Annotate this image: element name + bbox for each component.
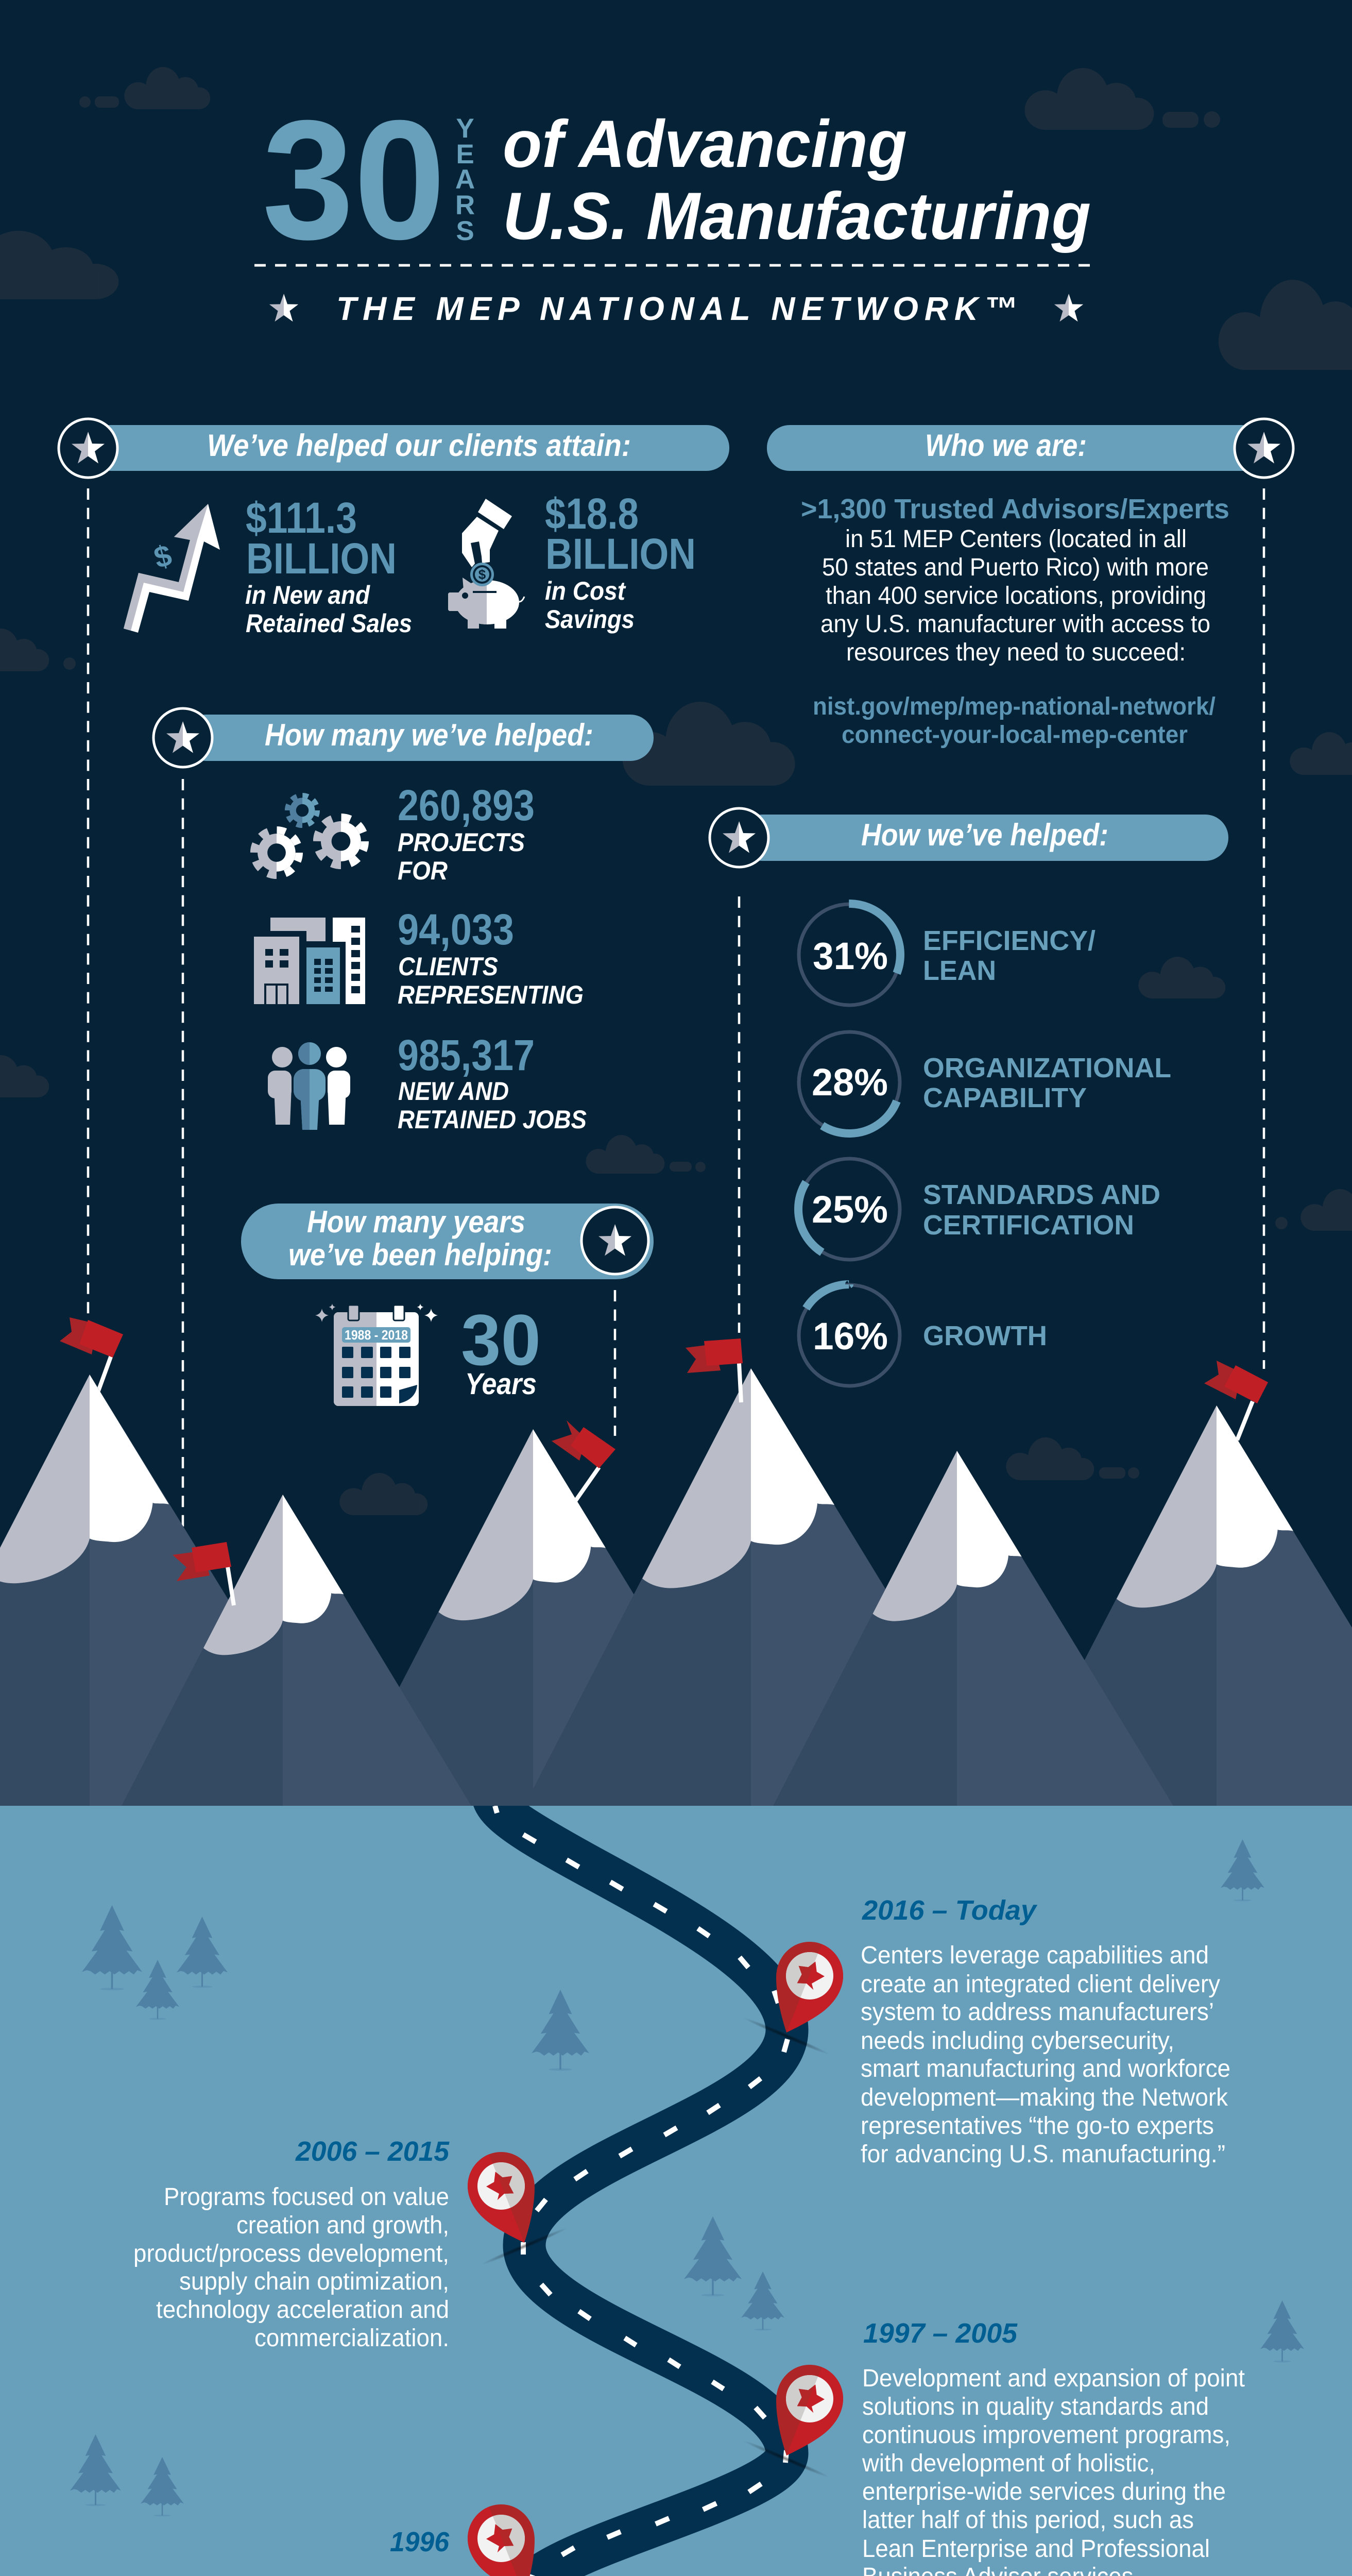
milestone: 2006 – 2015: technology acceleration and <box>156 2296 449 2324</box>
who we are text: >1,300 Trusted Advisors/Experts <box>801 494 1229 524</box>
vertical word YEARS: Y <box>456 113 474 144</box>
milestone: 2016 – Today: Centers leverage capabilities and <box>861 1942 1209 1969</box>
donut: 31% efficiency <box>798 904 1096 1006</box>
timeline road <box>493 1798 788 2576</box>
icon: gears <box>254 795 365 875</box>
milestone: 1997 – 2005: 1997 – 2005 <box>863 2318 1018 2349</box>
stat: jobs: NEW AND <box>398 1077 509 1106</box>
header: who we are: Who we are: <box>925 428 1087 463</box>
who we are text: in 51 MEP Centers (located in all <box>845 526 1187 553</box>
figure: $111.3 <box>246 494 357 542</box>
caption: in Cost <box>545 577 626 605</box>
donut: 31% efficiency: EFFICIENCY/ <box>923 925 1096 956</box>
icon: rising arrow <box>124 504 220 633</box>
header: we've helped our clients attain: We’ve helped our clients attain: <box>207 428 631 463</box>
link: nist.gov/mep/mep-national-network/ <box>813 693 1216 720</box>
stat: clients: REPRESENTING <box>398 980 584 1009</box>
milestone: 2006 – 2015: creation and growth, <box>236 2212 449 2239</box>
stat: savings: BILLION <box>545 530 696 578</box>
who we are text: 50 states and Puerto Rico) with more <box>822 554 1209 581</box>
stat: savings <box>448 489 696 634</box>
who we are text: any U.S. manufacturer with access to <box>820 611 1210 638</box>
icon: people <box>268 1042 350 1130</box>
mountain 6 <box>1009 1405 1352 1806</box>
icon: star right <box>1054 294 1083 321</box>
vertical word YEARS: S <box>456 216 474 246</box>
milestone: 2006 – 2015: commercialization. <box>254 2325 449 2352</box>
stat: projects: FOR <box>398 856 448 885</box>
flag 6 <box>1204 1361 1268 1403</box>
header: how many we've helped <box>153 708 654 767</box>
stat: 30 years: 30 <box>461 1299 541 1380</box>
caption: in New and <box>245 581 370 609</box>
background: night sky <box>0 0 1352 1806</box>
figure: $18.8 <box>545 489 639 538</box>
title number 30: 30 <box>262 84 446 275</box>
milestone: 2006 – 2015: 2006 – 2015 <box>295 2136 450 2167</box>
stat: sales: Retained Sales <box>246 609 412 638</box>
milestone: 1997 – 2005: solutions in quality standards and <box>862 2393 1209 2420</box>
vertical word YEARS: E <box>456 139 474 170</box>
flag 4 <box>686 1338 743 1373</box>
milestone: 2016 – Today: representatives “the go-to experts <box>861 2112 1214 2140</box>
milestone: 2016 – Today: development—making the Network <box>861 2084 1228 2111</box>
timeline pins <box>468 1942 843 2576</box>
vertical word YEARS: A <box>455 164 475 195</box>
flag 1 <box>60 1317 123 1358</box>
subtitle text: THE MEP NATIONAL NETWORK™ <box>336 290 1017 327</box>
milestone: 2016 – Today: system to address manufacturers’ <box>861 1998 1214 2026</box>
milestone: 2016 – Today <box>861 1895 1230 2168</box>
header: we've helped our clients attain <box>59 419 729 478</box>
icon: hand and piggy bank: $ <box>478 567 486 582</box>
dashed guide lines <box>88 488 1264 1543</box>
mountain 5 <box>773 1451 1173 1806</box>
donut: 25% standards and certification <box>798 1158 1160 1260</box>
icon: hand and piggy bank <box>448 499 524 629</box>
donut: 16% growth: GROWTH <box>923 1320 1047 1351</box>
header: how we've helped: How we’ve helped: <box>861 818 1108 852</box>
stat: clients <box>254 905 584 1009</box>
donut: 16% growth: 16% <box>813 1315 888 1358</box>
title block <box>262 84 1091 275</box>
milestone: 1997 – 2005: Lean Enterprise and Professional <box>862 2535 1210 2563</box>
donut: 31% efficiency: LEAN <box>923 955 996 986</box>
icon: calendar <box>315 1303 438 1406</box>
flag 3 <box>552 1420 615 1468</box>
milestone: 1997 – 2005: with development of holistic, <box>862 2450 1155 2477</box>
milestone: 2006 – 2015: Programs focused on value <box>164 2183 449 2211</box>
trees <box>70 1839 1304 2576</box>
donut: 25% standards and certification: CERTIFICATION <box>923 1210 1134 1241</box>
who we are text <box>801 494 1229 749</box>
stat: clients: 94,033 <box>398 905 514 954</box>
icon: calendar: 1988 - 2018 <box>345 1327 408 1343</box>
title line 1: of Advancing <box>503 106 907 181</box>
background clouds <box>0 67 1352 1515</box>
donut: 25% standards and certification: STANDARDS AND <box>923 1179 1160 1210</box>
who we are text: resources they need to succeed: <box>846 639 1186 666</box>
vertical word YEARS: R <box>455 190 475 221</box>
stat: jobs: RETAINED JOBS <box>398 1105 587 1134</box>
milestone: 1996: 1996 <box>390 2527 450 2557</box>
header: who we are <box>767 419 1293 478</box>
header: how we've helped <box>710 808 1228 867</box>
flag poles in front of peaks <box>228 1363 741 1605</box>
mountain 4 <box>524 1368 1018 1806</box>
milestone: 2016 – Today: create an integrated client delivery <box>861 1971 1220 1998</box>
icon: star left <box>269 294 298 321</box>
header: how many years: How many years <box>307 1205 525 1239</box>
road centre dashes <box>495 1806 788 2576</box>
milestone: 2006 – 2015 <box>133 2136 450 2352</box>
milestone: 1997 – 2005: continuous improvement programs, <box>862 2421 1230 2449</box>
stat: 30 years <box>315 1299 541 1406</box>
who we are text: than 400 service locations, providing <box>826 582 1206 609</box>
who we are text: connect-your-local-mep-center <box>842 721 1188 749</box>
milestone: 2016 – Today: for advancing U.S. manufacturing.” <box>861 2141 1225 2168</box>
stat: projects: PROJECTS <box>398 828 525 857</box>
stat: projects <box>250 790 534 880</box>
header: how many years <box>241 1204 654 1279</box>
milestone: 1997 – 2005: latter half of this period, such as <box>862 2506 1194 2534</box>
milestone: 2016 – Today: 2016 – Today <box>862 1895 1038 1926</box>
milestone: 2006 – 2015: product/process development, <box>133 2240 449 2267</box>
stat: clients: CLIENTS <box>398 952 498 981</box>
donut: 28% organizational capability: ORGANIZATIONAL <box>923 1053 1171 1083</box>
mountain 2 <box>122 1495 471 1806</box>
subtitle with stars <box>269 290 1083 327</box>
milestone: 1996 <box>106 2527 450 2576</box>
donut: 28% organizational capability <box>798 1031 1171 1133</box>
donut: 31% efficiency: 31% <box>813 935 888 977</box>
milestone: 1997 – 2005: enterprise-wide services during the <box>862 2478 1226 2505</box>
vertical word YEARS <box>455 113 475 246</box>
donut: 16% growth <box>798 1284 1047 1386</box>
stat: savings: Savings <box>545 605 635 634</box>
lower panel background <box>0 1806 1352 2576</box>
header: how many we've helped: How many we’ve helped: <box>265 718 593 752</box>
header: how many years: we’ve been helping: <box>288 1238 552 1272</box>
stat: jobs <box>268 1040 586 1130</box>
milestone: 1997 – 2005 <box>862 2318 1245 2576</box>
stat: 30 years: Years <box>465 1367 537 1401</box>
stat: sales <box>124 494 412 638</box>
stat: jobs: 985,317 <box>398 1031 535 1079</box>
stat: projects: 260,893 <box>398 781 535 829</box>
donut: 25% standards and certification: 25% <box>812 1188 888 1231</box>
donut: 28% organizational capability: CAPABILITY <box>923 1082 1087 1113</box>
title line 2: U.S. Manufacturing <box>503 178 1091 253</box>
mountains <box>0 1355 1352 1806</box>
milestone: 1997 – 2005: Development and expansion of point <box>862 2365 1245 2392</box>
flag poles behind peaks <box>97 1355 1253 1502</box>
icon: buildings <box>254 918 365 1004</box>
milestone: 2016 – Today: needs including cybersecurity, <box>861 2027 1174 2055</box>
icon: rising arrow: $ <box>150 538 175 575</box>
mountain 1 <box>0 1375 355 1806</box>
stat: sales: BILLION <box>246 534 397 583</box>
milestone: 2016 – Today: smart manufacturing and workforce <box>861 2055 1230 2082</box>
flag 2 <box>173 1542 231 1581</box>
mountain 3 <box>338 1429 763 1806</box>
donut: 28% organizational capability: 28% <box>812 1061 888 1104</box>
milestone: 2006 – 2015: supply chain optimization, <box>179 2268 449 2295</box>
